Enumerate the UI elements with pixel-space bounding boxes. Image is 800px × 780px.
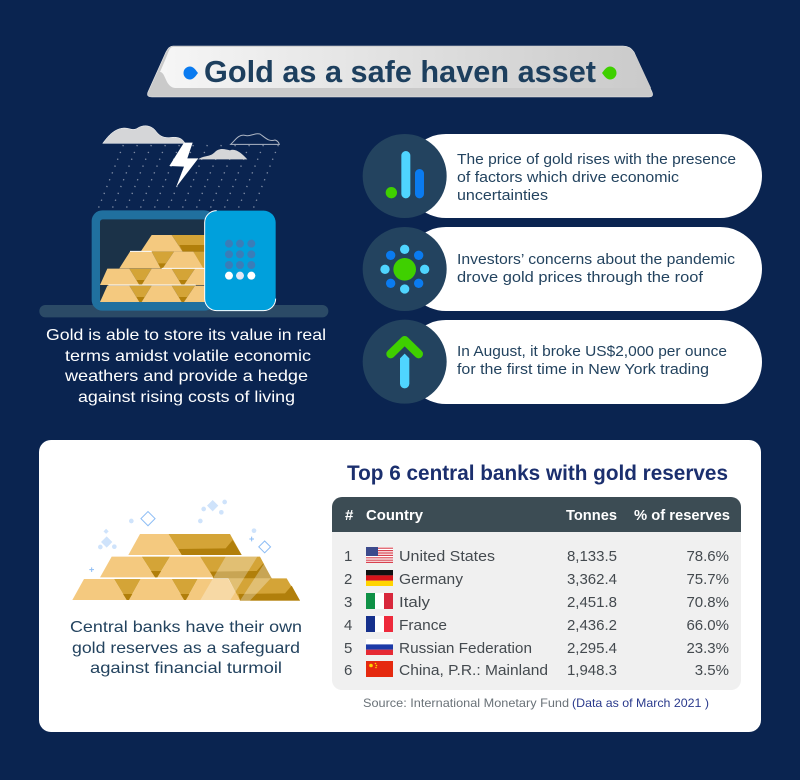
- row: Italy: 70.8%: [686, 594, 729, 611]
- cloud outline right: [231, 134, 279, 144]
- row: Russian Federation: [344, 639, 729, 657]
- row: Germany: Germany: [399, 571, 464, 588]
- row: China: 6: [344, 662, 352, 679]
- text: price: The price of gold rises with the presence: [457, 151, 736, 168]
- safe body: [92, 210, 215, 311]
- bars: [168, 534, 242, 555]
- table header: Country: [366, 507, 424, 524]
- text: gold stores value: [46, 327, 326, 406]
- heading: table title: Top 6 central banks with gold reserves: [347, 462, 728, 485]
- row: United States: United States: [399, 548, 495, 565]
- table header: [332, 497, 741, 532]
- text: reserves safeguard: [70, 619, 302, 677]
- title banner: [148, 46, 653, 97]
- row: Italy: [344, 593, 729, 611]
- text: price: of factors which drive economic: [457, 169, 680, 186]
- illustration: gold bars: [72, 500, 300, 601]
- title droplet green: [602, 66, 617, 80]
- table header: Tonnes: [566, 507, 617, 524]
- row: China: 1,948.3: [567, 662, 617, 679]
- row: France: 4: [344, 617, 352, 634]
- row: Italy: 3: [344, 594, 352, 611]
- title droplet blue: [184, 66, 198, 80]
- source note: (Data as of March 2021 ): [572, 696, 709, 710]
- text: reserves safeguard: Central banks have their own: [70, 619, 302, 636]
- text: price: uncertainties: [457, 187, 548, 204]
- row: Russian Federation: 2,295.4: [567, 640, 617, 657]
- illustration: safe with gold under storm: [39, 126, 328, 317]
- icon: virus: [363, 227, 447, 311]
- text: price: [457, 151, 736, 204]
- panel: pandemic: [363, 227, 762, 311]
- row: France: 2,436.2: [567, 617, 617, 634]
- cloud left: [103, 126, 185, 143]
- row: Germany: 75.7%: [686, 571, 729, 588]
- icon: bar chart: [363, 134, 447, 218]
- row: United States: 78.6%: [686, 548, 729, 565]
- text: gold stores value: terms amidst volatile economic: [65, 348, 311, 365]
- row: Italy: 2,451.8: [567, 594, 617, 611]
- table: [332, 497, 741, 690]
- text: gold stores value: weathers and provide a hedge: [64, 368, 308, 385]
- row: Germany: 3,362.4: [567, 571, 617, 588]
- cloud middle: [198, 149, 247, 159]
- lightning bolt: [169, 143, 198, 187]
- source note: [363, 696, 709, 710]
- safe door: [205, 211, 276, 311]
- table header: #: [345, 507, 354, 524]
- glare: [200, 557, 257, 601]
- rain: [98, 145, 278, 208]
- icon: up arrow: [363, 320, 447, 404]
- safe interior: [100, 219, 210, 302]
- text: price record: In August, it broke US$2,000 per ounce: [457, 343, 727, 360]
- row: France: [344, 616, 729, 634]
- row: Germany: [344, 570, 729, 588]
- row: France: France: [399, 617, 447, 634]
- text: gold stores value: against rising costs of living: [78, 389, 295, 406]
- table header: % of reserves: [634, 507, 730, 524]
- panel: central banks: [39, 440, 761, 732]
- row: France: 66.0%: [686, 617, 729, 634]
- panel: price rises: [363, 134, 762, 218]
- row: United States: 1: [344, 548, 352, 565]
- text: pandemic: [457, 251, 736, 286]
- row: United States: [344, 547, 729, 565]
- sparkles: [98, 500, 256, 549]
- row: Italy: Italy: [399, 594, 431, 611]
- row: Russian Federation: 5: [344, 640, 352, 657]
- text: pandemic: drove gold prices through the roof: [457, 269, 704, 286]
- source note: Source: International Monetary Fund: [363, 696, 569, 710]
- row: Germany: 2: [344, 571, 352, 588]
- text: gold stores value: Gold is able to store its value in real: [46, 327, 326, 344]
- text: price record: [457, 343, 727, 378]
- row: China: [344, 661, 729, 679]
- text: reserves safeguard: gold reserves as a safeguard: [72, 640, 300, 657]
- gold bars stack: [100, 235, 205, 302]
- row: Russian Federation: Russian Federation: [399, 640, 532, 657]
- heading: title: Gold as a safe haven asset: [204, 54, 596, 89]
- row: China: 3.5%: [695, 662, 729, 679]
- row: China: China, P.R.: Mainland: [399, 662, 548, 679]
- row: Russian Federation: 23.3%: [686, 640, 729, 657]
- panel: US$2,000: [363, 320, 762, 404]
- text: reserves safeguard: against financial turmoil: [90, 660, 282, 677]
- text: pandemic: Investors’ concerns about the pandemic: [457, 251, 736, 268]
- ground shadow: [39, 305, 328, 317]
- row: United States: 8,133.5: [567, 548, 617, 565]
- text: price record: for the first time in New York trading: [457, 361, 709, 378]
